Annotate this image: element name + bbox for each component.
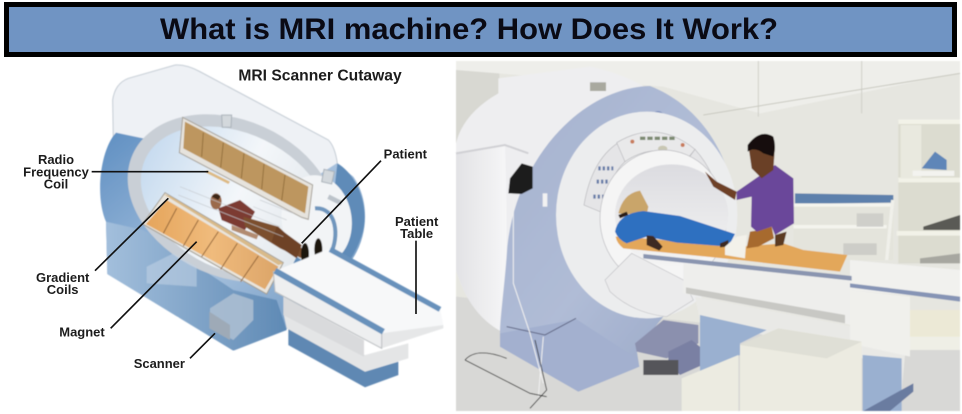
label: Magnet: Magnet	[59, 325, 105, 340]
blue ring	[500, 86, 737, 392]
label: Patient: Patient	[384, 147, 428, 162]
title banner	[6, 4, 954, 54]
white steps	[740, 328, 862, 411]
label: Patient Table: Table	[400, 226, 433, 241]
title banner: What is MRI machine? How Does It Work?	[160, 13, 778, 46]
upper magnet segment	[179, 117, 313, 219]
lower magnet segment	[143, 193, 283, 294]
label: Gradient Coils: Coils	[47, 282, 79, 297]
headset on machine	[508, 163, 533, 194]
chart heading: MRI Scanner Cutaway: MRI Scanner Cutaway	[238, 67, 402, 84]
patient in blue gown	[615, 211, 774, 258]
control panels	[584, 143, 625, 213]
patient	[210, 193, 322, 265]
translucent housing	[113, 65, 347, 233]
side bracket	[210, 293, 253, 340]
floor cables	[465, 340, 547, 408]
orange sheet on table	[616, 237, 847, 272]
technician	[705, 134, 794, 247]
bore ribs	[178, 187, 293, 237]
label: Gradient Coils: Gradient	[36, 270, 90, 285]
panel: MRI scanner cutaway diagram	[23, 65, 443, 387]
bore mouth	[276, 171, 358, 269]
label: Radio Frequency Coil: Frequency	[23, 165, 90, 180]
panel: MRI machine photograph	[456, 61, 960, 411]
GE logo	[652, 111, 664, 122]
bore opening	[600, 150, 727, 287]
blue ring and base	[100, 133, 365, 351]
label: Patient Table: Patient	[395, 214, 439, 229]
patient table	[288, 328, 398, 387]
shelves	[897, 122, 960, 350]
label: Scanner: Scanner	[134, 356, 185, 371]
room background	[456, 61, 960, 411]
side table with linens	[793, 193, 893, 260]
scanner body illustration	[100, 65, 443, 387]
table support	[695, 297, 907, 411]
label: Radio Frequency Coil: Coil	[44, 177, 68, 192]
inner grey ring	[101, 83, 362, 314]
machine foot pedestals	[635, 320, 698, 358]
machine rear housing	[456, 67, 683, 350]
cryostat ports	[222, 115, 232, 127]
table top	[683, 263, 852, 325]
label: Radio Frequency Coil: Radio	[38, 152, 74, 167]
leader lines	[92, 161, 416, 358]
front white face	[556, 112, 737, 318]
